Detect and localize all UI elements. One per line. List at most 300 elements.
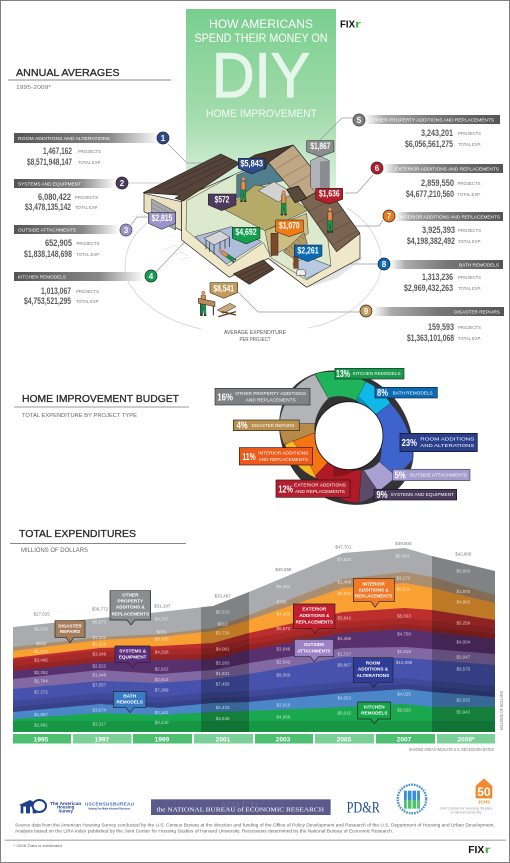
year bar: 2005 (337, 736, 352, 744)
item 9: disaster: $1,363,101,068 (407, 333, 454, 344)
heading: total expenditures: MILLIONS OF DOLLARS (21, 548, 88, 554)
year bar: 2007 (397, 736, 412, 744)
logo: American Housing Survey: The American (50, 801, 82, 806)
callout: bath remodels: BATH (123, 694, 137, 699)
chart values right half: $1,619 (397, 649, 411, 654)
label 16 percent: OTHER PROPERTY ADDITIONS (235, 391, 306, 396)
item 8: bath: 8 (382, 260, 387, 269)
chart values left half: $36,772 (92, 607, 109, 612)
item 2: systems and equipment: TOTAL EXP. (75, 205, 98, 210)
label 13 percent: KITCHEN REMODELS (353, 371, 401, 376)
chart values right half: $47,701 (335, 544, 352, 549)
item 5: other property: 5 (357, 116, 362, 125)
upper floor (225, 185, 308, 231)
chart values right half: $4,456 (337, 636, 352, 641)
item 3: outside attachments: 652,905 (45, 238, 73, 249)
heading: home improvement budget: TOTAL EXPENDITURE BY PROJECT TYPE (22, 413, 137, 419)
price tag 2815 (148, 213, 176, 229)
year bar: 1997 (95, 736, 110, 744)
chart values left half: $2,681 (34, 723, 48, 728)
price tag 8541 (210, 283, 238, 298)
label 5 percent (393, 469, 470, 481)
callout: disaster repairs: REPAIRS (60, 629, 80, 634)
skylight window (287, 186, 307, 203)
year bar: 2003 (276, 736, 291, 744)
item 7: interior: 3,925,393 (422, 225, 455, 236)
item 2: systems and equipment: SYSTEMS AND EQUIPMENT (18, 182, 81, 186)
year bar (13, 734, 495, 744)
logo: JCHS: 50 (477, 785, 491, 799)
segment red (315, 458, 361, 503)
item 7: interior (383, 210, 503, 247)
item 4: kitchen remodels: TOTAL EXP. (76, 299, 99, 304)
callouts left half (55, 591, 151, 713)
area: bath remodels (13, 689, 495, 732)
chart values left half: $5,372 (216, 609, 230, 614)
logo: Fixr top: r (355, 20, 361, 30)
chart values right half: $5,572 (276, 626, 291, 631)
year bar: 1999 (155, 736, 170, 744)
chart values right half: $2,047 (456, 654, 471, 659)
logo: JCHS: of Harvard University (450, 811, 482, 815)
item 5: other property (353, 114, 500, 150)
callout: other property: REPLACEMENTS (112, 611, 149, 616)
chart values right half: $5,943 (456, 710, 471, 715)
callout: kitchen remodels: REMODELS (361, 710, 388, 715)
segment blue (371, 403, 413, 477)
item 4: kitchen remodels: PROJECTS (76, 289, 99, 294)
heading: home improvement budget: HOME IMPROVEMENT BUDGET (22, 393, 180, 405)
item 1: room additions: PROJECTS (78, 149, 101, 154)
kitchen table (204, 231, 230, 254)
chart values right half: $5,563 (397, 614, 411, 619)
donut rim shadow (279, 371, 413, 505)
label 12 percent: EXTERIOR ADDITIONS (294, 483, 346, 488)
item 2: systems and equipment: PROJECTS (75, 195, 98, 200)
item 2: systems and equipment: 2 (120, 179, 125, 188)
item 5: other property: OTHER PROPERTY ADDITIONS AND REPLACEMENTS (371, 118, 494, 122)
item 1: room additions (14, 132, 169, 168)
chart values right half: $2,910 (276, 702, 291, 707)
item 5: other property: PROJECTS (458, 131, 481, 136)
footer rule (5, 839, 506, 842)
callout: interior: INTERIOR (363, 581, 385, 586)
chart values left half: $4,767 (155, 616, 169, 621)
price tag 2261 (294, 245, 322, 262)
chart values right half: $6,502 (337, 591, 352, 596)
price tag 1636: $1,636 (319, 189, 340, 199)
average ellipse arcs (125, 208, 381, 329)
chart values left half: $1,784 (34, 678, 48, 683)
item 7: interior: PROJECTS (458, 228, 481, 233)
kitchen room floor (195, 227, 262, 264)
callout: room additions (353, 658, 393, 687)
item 1: room additions: ROOM ADDITIONS AND ALTERATIONS (18, 136, 110, 141)
label 4 percent: 4% (237, 421, 248, 432)
chart values left half: $7,459 (216, 682, 230, 687)
item 4: kitchen remodels: 4 (149, 272, 154, 281)
label 4 percent: DISASTER REPAIRS (252, 423, 294, 428)
item 3: outside attachments (14, 224, 132, 260)
footer logos (5, 778, 506, 856)
item 4: kitchen remodels: KITCHEN REMODELS (18, 274, 66, 280)
chart values right half: $5,842 (337, 615, 352, 620)
chart values right half: $5,259 (456, 620, 471, 625)
chart values left half: $1,531 (216, 671, 230, 676)
item 2: systems and equipment: 6,080,422 (38, 192, 71, 203)
segment orange (284, 433, 332, 476)
item 3: outside attachments: 3 (124, 226, 129, 235)
label 11 percent: AND REPLACEMENTS (259, 457, 308, 462)
year bar: 2001 (216, 736, 231, 744)
chart values right half: $40,558 (275, 567, 292, 572)
segment dark purple (359, 470, 378, 503)
chart values left half: $2,433 (216, 705, 230, 710)
item 6: exterior (371, 162, 503, 200)
connector lines (128, 118, 383, 312)
chart values left half: $4,646 (216, 716, 230, 721)
source text: Analysis based on the LIRA index published by the Joint Center for Housing Studies of Harvard University. Recessions determined by the National Bureau of Economic Research. (15, 829, 393, 834)
chart values left half: $812 (218, 621, 228, 626)
item 1: room additions: $8,571,948,147 (27, 157, 72, 168)
upper ridge roof (240, 145, 293, 169)
chart values left half: $31,197 (154, 603, 171, 608)
callout: bath remodels (113, 692, 146, 713)
bed (258, 182, 293, 202)
callout: outside attachments (294, 639, 334, 662)
item 8: bath: $2,969,432,263 (404, 283, 453, 294)
callout: disaster repairs: DISASTER (58, 623, 82, 628)
segment green (315, 372, 366, 401)
label 4 percent (233, 420, 299, 432)
heading: annual averages (8, 67, 171, 91)
chart values left half: $27,625 (34, 612, 50, 617)
stacked area chart (13, 541, 495, 744)
heading: total expenditures: TOTAL EXPENDITURES (19, 528, 136, 540)
chart values right half: $3,646 (276, 646, 291, 651)
average expenditure caption: PER PROJECT (240, 337, 270, 343)
item 4: kitchen remodels: 1,013,067 (41, 286, 71, 297)
chart values left half (34, 593, 231, 728)
house outer walls (182, 162, 360, 287)
callout: interior: ADDITIONS & (359, 587, 389, 592)
logo: PD&R: PD&R (347, 799, 381, 816)
logo: Fixr top: FIX (340, 20, 355, 30)
logo: Fixr bottom: FIX (468, 845, 485, 856)
label 8 percent (375, 387, 437, 399)
callout: room additions: ROOM (366, 660, 380, 665)
exterior lower shading (13, 629, 495, 671)
year bar: 1995 (34, 736, 49, 744)
chart values left half: $1,448 (92, 672, 107, 677)
right roof tan (268, 145, 327, 201)
logo: Fixr bottom: r (485, 845, 491, 856)
label 23 percent: AND ALTERATIONS (420, 443, 474, 448)
callout: systems and equipment: SYSTEMS & (119, 648, 147, 653)
callout: disaster repairs (55, 621, 85, 643)
chart values left half: $4,061 (216, 647, 230, 652)
label 13 percent (335, 368, 404, 380)
item 9: disaster (360, 305, 504, 344)
chart values left half: $865 (157, 629, 167, 634)
price tag 572: $572 (215, 194, 229, 204)
chart values left half: $935 (36, 641, 46, 646)
label 23 percent: ROOM ADDITIONS (420, 437, 474, 442)
upper back wall (237, 163, 287, 198)
area: disaster repairs (13, 572, 495, 732)
chart values left half: $2,252 (34, 670, 48, 675)
item 9: disaster: TOTAL EXP. (458, 336, 481, 341)
item 6: exterior: $4,677,210,560 (406, 189, 454, 200)
heading: total expenditures (10, 528, 186, 554)
label 16 percent: 16% (217, 392, 233, 403)
chart values right half: $4,462 (276, 611, 291, 616)
source text: Source data from the American Housing Survey conducted by the U.S. Census Bureau at the direction and funding of the Office of Policy Development and Research of the U.S. Department of Housing and Urban Development. (15, 822, 495, 827)
callout: systems and equipment (115, 646, 150, 668)
item 4: kitchen remodels (14, 270, 157, 307)
area: exterior (13, 608, 495, 732)
label 9 percent (374, 489, 457, 501)
label 11 percent: INTERIOR ADDITIONS (258, 451, 308, 456)
chart values right half (275, 541, 472, 719)
donut chart (215, 368, 477, 505)
item 5: other property: $6,056,561,275 (405, 139, 453, 150)
chart values right half: $4,963 (456, 600, 471, 605)
footnote: * 2009 Data is estimated (13, 843, 62, 848)
callout: room additions: ALTERATIONS (357, 673, 389, 678)
chart values right half: $1,875 (456, 589, 471, 594)
right roof brown (301, 187, 360, 252)
item 5: other property: 3,243,201 (421, 128, 453, 139)
segment tan (279, 423, 315, 444)
callout: room additions: ADDITIONS & (358, 667, 389, 672)
item 9: disaster: DISASTER REPAIRS (454, 310, 500, 314)
chart values left half: $5,573 (92, 620, 107, 625)
title panel: HOW AMERICANS (209, 19, 313, 31)
item 3: outside attachments: OUTSIDE ATTACHMENTS (18, 228, 76, 232)
segment cyan (356, 382, 391, 418)
price tag 4692 (232, 227, 260, 244)
kitchen lower shading (13, 721, 495, 732)
house illustration (133, 141, 363, 317)
area: other property (13, 548, 495, 732)
interior walls (186, 163, 331, 280)
heading: annual averages: 1995-2009* (16, 85, 52, 91)
gray utility unit (311, 156, 329, 197)
recession band 2009 (432, 556, 495, 732)
price tag 1070 (276, 220, 303, 237)
price tag 5843: $5,843 (240, 158, 263, 168)
chart values right half: $4,759 (397, 632, 411, 637)
area: room additions (13, 657, 495, 732)
price tag 4692: $4,692 (235, 227, 257, 237)
callout: bath remodels: REMODELS (116, 700, 143, 705)
item 8: bath: TOTAL EXP. (458, 286, 481, 291)
item 8: bath: 1,313,236 (422, 272, 453, 283)
chart values right half: $6,510 (396, 586, 411, 591)
label 12 percent (276, 480, 350, 497)
construction dust (133, 214, 188, 260)
workers (200, 177, 333, 316)
chart values right half: $6,620 (397, 708, 411, 713)
callout: outside attachments: OUTSIDE (304, 642, 324, 647)
recession band 2001 (201, 592, 249, 732)
title panel: HOME IMPROVEMENT (206, 108, 317, 120)
item 9: disaster: PROJECTS (458, 325, 481, 330)
logo: NBER: NBER (220, 800, 260, 816)
label 12 percent: 12% (278, 484, 293, 495)
logo: JCHS: Joint Center for Housing Studies (440, 807, 493, 811)
callout: exterior (293, 604, 335, 633)
label 13 percent: 13% (336, 369, 350, 380)
price tag 5843 (238, 158, 265, 174)
callout: exterior: EXTERIOR (302, 607, 327, 612)
callout: other property: PROPERTY (118, 599, 144, 604)
label 8 percent: BATH REMODELS (393, 390, 433, 395)
label 5 percent: OUTSIDE ATTACHMENTS (410, 473, 467, 478)
logo: Fixr bottom (468, 845, 491, 856)
callout: kitchen remodels (358, 702, 391, 724)
area: kitchen remodels (13, 704, 495, 732)
chart values right half: $1,717 (337, 652, 352, 657)
logo: JCHS: JCHS (478, 800, 490, 805)
callout: other property: ADDITONS & (116, 605, 145, 610)
chart values left half: $7,272 (34, 689, 48, 694)
item 5: other property: TOTAL EXP. (458, 142, 481, 147)
item 3: outside attachments: PROJECTS (76, 241, 100, 246)
bath room (293, 256, 331, 279)
chart values left half: $7,557 (92, 683, 107, 688)
chart values right half: $4,025 (397, 692, 411, 697)
source text (15, 822, 495, 834)
year bar: 2009* (457, 736, 475, 744)
chart values right half: $9,575 (456, 667, 471, 672)
title panel: SPEND THEIR MONEY ON (194, 33, 328, 45)
callout: other property: OTHER (122, 593, 139, 598)
item 1: room additions: TOTAL EXP. (78, 160, 101, 165)
callout: kitchen remodels: KITCHEN (364, 705, 385, 710)
logo: JCHS (440, 778, 493, 815)
item 1: room additions: 1,467,162 (43, 146, 72, 157)
callout: outside attachments: ATTACHMENTS (297, 648, 331, 653)
rotated axis label: MILLIONS OF DOLLARS (499, 691, 504, 730)
chart values left half: $4,328 (155, 650, 169, 655)
chart values right half: $3,172 (396, 575, 411, 580)
donut hole (315, 402, 383, 470)
chart values right half: $42,906 (455, 552, 472, 557)
logo: US Census Bureau: USCENSUSBUREAU (85, 801, 135, 806)
item 2: systems and equipment: $3,478,135,142 (25, 202, 71, 213)
price tag 1867: $1,867 (310, 141, 330, 151)
item 6: exterior: 2,859,550 (421, 178, 454, 189)
label 9 percent: 9% (376, 490, 388, 501)
logo: American Housing Survey: Survey (58, 808, 73, 813)
chart values left half: $7,369 (155, 687, 169, 692)
price tag 1636 (316, 188, 343, 204)
item 1: room additions: 1 (161, 134, 166, 143)
item 2: systems and equipment (14, 177, 128, 213)
title panel (186, 9, 336, 209)
price tag 8541: $8,541 (213, 283, 234, 293)
chart values left half: $2,228 (92, 642, 107, 647)
average expenditure caption (224, 330, 287, 343)
left roof (143, 154, 240, 201)
heading: annual averages: ANNUAL AVERAGES (16, 67, 120, 79)
chart values right half: $10,098 (396, 660, 413, 665)
chart values left half: $2,615 (155, 677, 169, 682)
chart values left half: $1,102 (92, 635, 107, 640)
hall and stairs (265, 213, 308, 258)
chart values right half: $6,434 (395, 553, 410, 558)
callout: exterior: ADDITIONS & (299, 613, 330, 618)
chart values left half: $3,445 (34, 658, 48, 663)
chart values left half: $3,440 (155, 720, 169, 725)
item 6: exterior: PROJECTS (458, 181, 481, 186)
chart values right half: $6,603 (456, 568, 471, 573)
price tag 2261: $2,261 (297, 246, 319, 256)
item 9: disaster: 9 (364, 307, 369, 316)
chart values left half: $1,872 (34, 649, 48, 654)
chart values right half: $4,004 (456, 639, 471, 644)
item 7: interior: 7 (387, 212, 392, 221)
chart values left half: $3,317 (92, 721, 107, 726)
item 7: interior: $4,198,382,492 (407, 236, 455, 247)
label 11 percent (239, 448, 313, 465)
logo: NBER (151, 799, 331, 816)
chart values left half: $3,720 (216, 631, 230, 636)
price tag 2815: $2,815 (152, 213, 172, 223)
chart values right half: $9,867 (337, 662, 352, 667)
chart values right half: $4,966 (276, 714, 291, 719)
callout: interior: REPLACEMENTS (355, 594, 392, 599)
chart values right half: $2,632 (456, 698, 471, 703)
item 8: bath (378, 258, 503, 294)
chart values right half: $795 (277, 599, 287, 604)
item 8: bath: BATH REMODELS (459, 262, 499, 268)
chart values left half: $3,349 (92, 651, 107, 656)
callout: interior (353, 578, 394, 607)
logo: NBER: the NATIONAL BUREAU of ECONOMIC RESEARCH (157, 806, 324, 813)
chart values left half: $2,922 (155, 666, 169, 671)
chart values left half: $3,330 (155, 637, 169, 642)
title panel: DIY (212, 41, 310, 111)
item 3: outside attachments: TOTAL EXP. (76, 252, 100, 257)
label 16 percent: AND REPLACEMENTS (246, 397, 296, 402)
ground shadow (308, 247, 363, 287)
chart values left half: $3,263 (216, 660, 230, 665)
segment yellow (285, 439, 317, 478)
label 23 percent: 23% (402, 438, 417, 449)
label 23 percent (400, 433, 477, 452)
item 7: interior: INTERIOR ADDITIONS AND REPLACEMENTS (400, 214, 500, 220)
area: interior (13, 583, 495, 732)
chart values left half: $5,518 (34, 626, 48, 631)
label 5 percent: 5% (395, 470, 406, 481)
segment gray (279, 375, 328, 424)
workbench and boards (198, 298, 236, 317)
callout: exterior: REPLACEMENTS (296, 619, 333, 624)
item 9: disaster: 159,593 (428, 322, 454, 333)
callout: systems and equipment: EQUIPMENT (119, 654, 147, 659)
garage (144, 193, 182, 231)
area: outside attachments (13, 647, 495, 732)
item 3: outside attachments: $1,838,148,698 (24, 249, 72, 260)
price tag 572 (208, 194, 236, 211)
heading: home improvement budget (14, 393, 189, 419)
logo: US Census Bureau (85, 801, 135, 810)
logo: American Housing Survey: Housing (57, 805, 75, 810)
label 16 percent (215, 388, 310, 405)
